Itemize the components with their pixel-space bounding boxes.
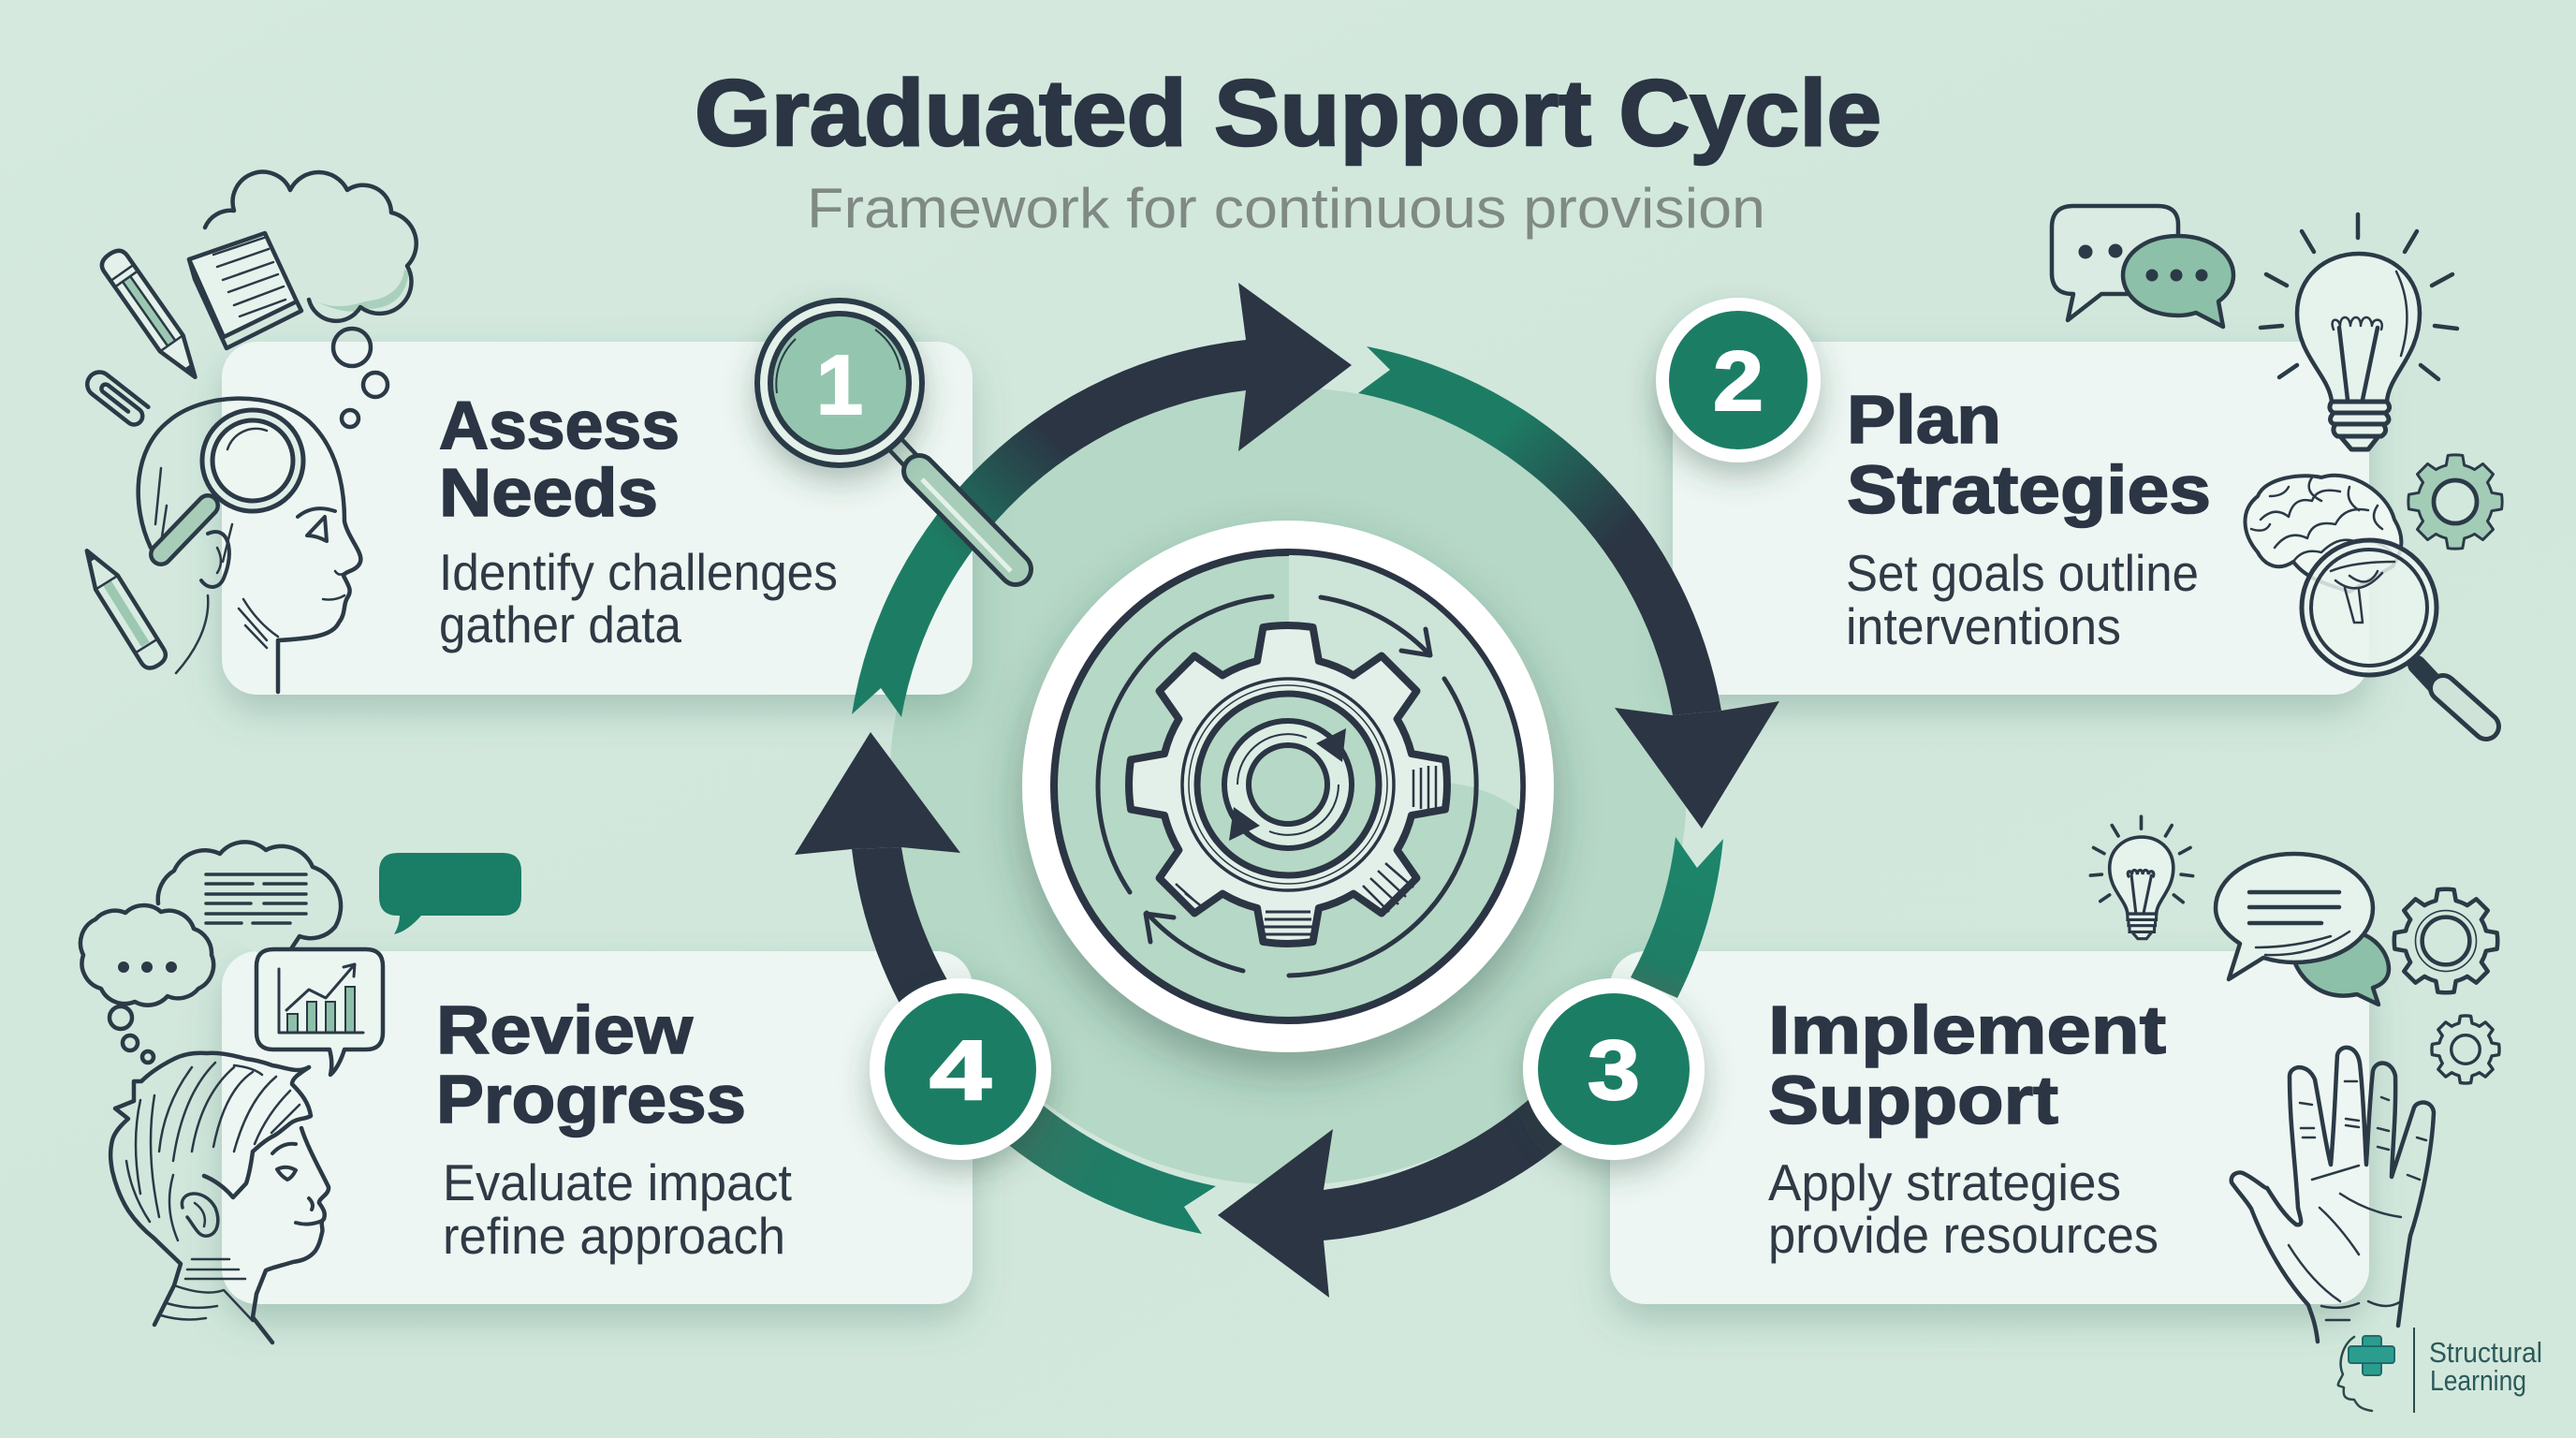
- neck and collar: [161, 1259, 253, 1321]
- icon: thought cloud: [205, 172, 417, 321]
- icon: light bulb: [2261, 214, 2457, 449]
- icon: paperclip: [82, 367, 151, 428]
- icon: dots thought cloud: [80, 905, 213, 1063]
- heading: Support: [1768, 1064, 2058, 1138]
- step 1 magnifier badge: 1: [816, 339, 863, 433]
- icon: raised hand: [2232, 1048, 2434, 1342]
- icon: boy profile: [110, 1053, 329, 1343]
- heading: [439, 389, 680, 531]
- icon: gear: [2408, 455, 2502, 549]
- icon: speech bubbles: [2216, 854, 2389, 1005]
- icon: book: [189, 233, 301, 348]
- step 2 badge: 2: [1713, 335, 1764, 429]
- logo divider: [2413, 1328, 2415, 1413]
- description: Evaluate impact: [443, 1153, 792, 1211]
- step 4 badge: 4: [929, 1024, 991, 1118]
- illustration: implement support: [2090, 816, 2499, 1342]
- description: gather data: [439, 595, 681, 653]
- heading: Review: [436, 993, 694, 1068]
- magnifier handle: [894, 443, 1016, 571]
- arrow: plan to implement: [1358, 346, 1779, 829]
- icon: pencil bottom: [76, 544, 169, 672]
- central cycle disc: [889, 388, 1687, 1185]
- description: refine approach: [443, 1207, 785, 1265]
- icon: pencil top: [97, 246, 207, 385]
- icon: thought bubbles: [333, 329, 388, 427]
- panel: review progress card: [222, 951, 973, 1304]
- gear: [1129, 625, 1447, 944]
- heading: [1768, 993, 2166, 1138]
- icon: gear: [2394, 889, 2497, 992]
- panel: assess needs card: [222, 342, 973, 695]
- assess needs text: [439, 389, 838, 653]
- icon: small light bulb: [2090, 816, 2193, 939]
- icon: chart bubble: [256, 949, 383, 1075]
- step 1 magnifier badge: [757, 301, 1016, 571]
- hair: [110, 1053, 309, 1325]
- logo text: Learning: [2430, 1364, 2526, 1397]
- emblem inner face: [1054, 552, 1522, 1020]
- step 3 badge: [1523, 978, 1705, 1160]
- arrow: implement segment green tail: [1631, 837, 1723, 998]
- logo text: [2429, 1336, 2542, 1397]
- central gear emblem: [1022, 521, 1554, 1052]
- icon: text thought cloud: [158, 842, 341, 964]
- illustration: assess needs: [76, 172, 417, 692]
- heading: Needs: [439, 456, 658, 531]
- heading: Implement: [1768, 993, 2166, 1068]
- logo: structural learning: [2338, 1328, 2542, 1413]
- eye and mouth: [272, 1144, 322, 1225]
- icon: brain: [2245, 476, 2401, 592]
- face: [253, 1128, 329, 1343]
- arrow: assess to plan: [852, 283, 1352, 717]
- arrow: review to assess: [795, 732, 973, 1049]
- panel: plan strategies card: [1673, 342, 2369, 695]
- heading: Progress: [436, 1063, 746, 1137]
- plan strategies text: [1846, 383, 2211, 655]
- illustration: plan strategies: [2052, 206, 2502, 726]
- heading: [1847, 383, 2211, 528]
- heading: Assess: [439, 389, 680, 463]
- implement support text: [1768, 993, 2166, 1264]
- step 4 badge: [870, 978, 1051, 1160]
- emblem white ring: [1022, 521, 1554, 1052]
- illustration: review progress: [80, 842, 521, 1343]
- review progress text: [436, 993, 792, 1265]
- logo head outline: [2338, 1337, 2372, 1411]
- icon: head profile: [139, 399, 360, 692]
- icon: green speech bubble: [379, 853, 521, 934]
- heading: [436, 993, 746, 1137]
- arrow: implement to review: [1218, 1077, 1591, 1298]
- hair strands: [126, 1063, 300, 1240]
- arrow: review segment green tail: [973, 1077, 1216, 1234]
- heading: Strategies: [1847, 453, 2211, 528]
- subtitle: Framework for continuous provision: [807, 177, 1765, 240]
- description: [439, 543, 838, 653]
- description: [443, 1153, 792, 1265]
- description: provide resources: [1768, 1206, 2159, 1264]
- icon: small gear: [2432, 1016, 2499, 1083]
- description: interventions: [1846, 597, 2121, 655]
- magnifier on head: [161, 506, 208, 554]
- logo text: Structural: [2429, 1336, 2542, 1369]
- step 3 badge: 3: [1588, 1024, 1640, 1118]
- circular motion arrows: [1098, 596, 1476, 976]
- description: Apply strategies: [1768, 1153, 2121, 1211]
- logo cross mark: [2349, 1336, 2394, 1375]
- panel: implement support card: [1610, 951, 2369, 1304]
- ear: [182, 1194, 218, 1236]
- heading: Plan: [1847, 383, 2001, 458]
- description: [1846, 544, 2199, 655]
- step 2 badge: [1656, 298, 1821, 462]
- description: Set goals outline: [1846, 544, 2199, 602]
- icon: magnifier over brain: [2302, 540, 2486, 726]
- title: Graduated Support Cycle: [695, 61, 1881, 166]
- description: Identify challenges: [439, 543, 838, 601]
- description: [1768, 1153, 2159, 1264]
- icon: speech bubbles: [2052, 206, 2233, 327]
